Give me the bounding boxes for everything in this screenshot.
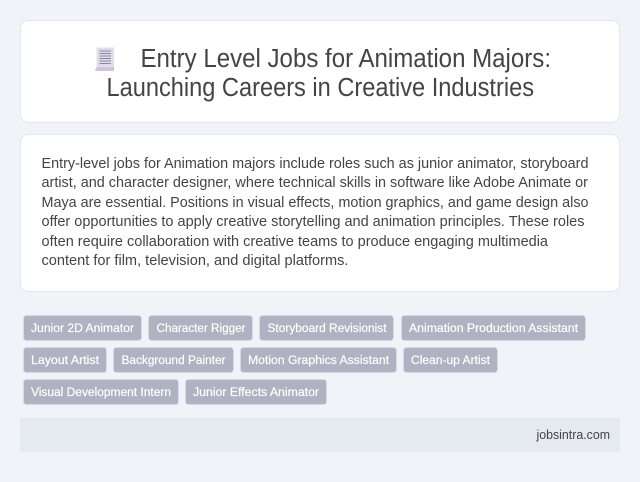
tag: Junior 2D Animator: Junior 2D Animator [31,321,134,335]
title: Launching Careers in Creative Industries [106,74,534,102]
text block: description: content for film, television, and digital platforms. [42,253,348,269]
tag: Storyboard Revisionist: Storyboard Revisionist [268,321,387,335]
panel: description [20,134,620,292]
text block: description: offer opportunities to apply creative storytelling and animation principles. These roles [42,214,584,230]
tag: Background Painter [114,348,234,372]
job tags [24,316,586,404]
tag: Animation Production Assistant [402,316,586,340]
tag: Character Rigger: Character Rigger [156,321,246,335]
tag: Layout Artist: Layout Artist [31,353,100,367]
tag: Clean-up Artist [404,348,498,372]
text block: description: artist, and character designer, where technical skills in software like Adobe Animate or [42,175,588,191]
tag: Junior 2D Animator [24,316,142,340]
tag: Junior Effects Animator [186,380,326,404]
tag: Junior Effects Animator: Junior Effects Animator [193,385,319,399]
panel: title card [20,20,620,122]
tag: Motion Graphics Assistant: Motion Graphics Assistant [248,353,390,367]
text block: description: Maya are essential. Positions in visual effects, motion graphics, and game design also [42,195,588,211]
icon: document scroll [95,48,114,71]
tag: Clean-up Artist: Clean-up Artist [411,353,491,367]
text block: description [42,156,588,269]
tag: Animation Production Assistant: Animation Production Assistant [409,321,579,335]
tag: Visual Development Intern: Visual Development Intern [31,385,171,399]
tag: Visual Development Intern [24,380,178,404]
text block: description: Entry-level jobs for Animation majors include roles such as junior animator, storyboard [42,156,588,172]
tag: Storyboard Revisionist [260,316,394,340]
text block: description: often require collaboration with creative teams to produce engaging multimedia [42,234,549,250]
title: Entry Level Jobs for Animation Majors: [140,45,551,73]
tag: Layout Artist [24,348,106,372]
tag: Background Painter: Background Painter [122,353,226,367]
footer text: jobsintra.com [536,427,610,442]
footer [20,418,620,452]
title [106,45,551,102]
tag: Motion Graphics Assistant [240,348,396,372]
tag: Character Rigger [148,316,252,340]
